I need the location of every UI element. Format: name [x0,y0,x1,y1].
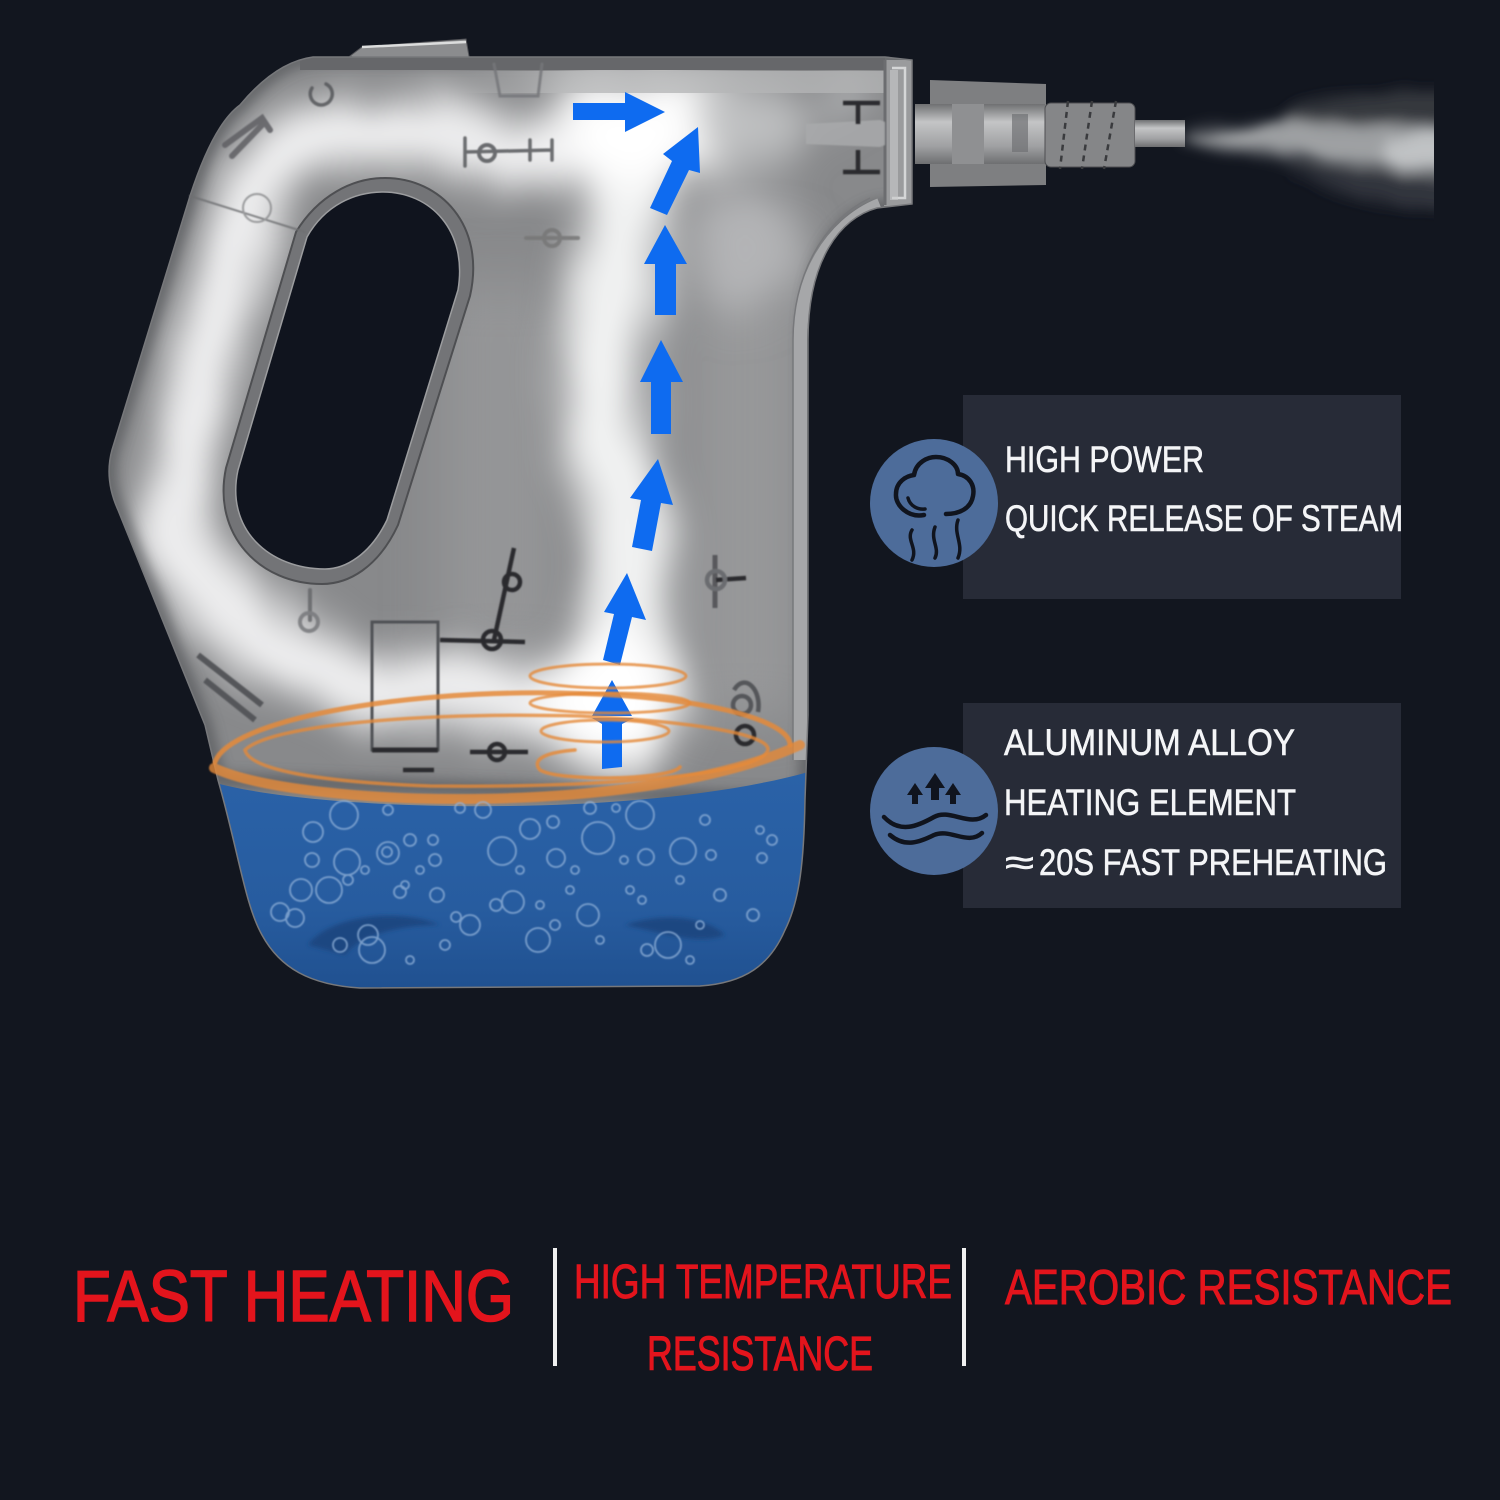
arrow 2 diagonal [650,127,700,215]
text: quick release: QUICK RELEASE OF STEAM [1005,498,1403,539]
right body lighter area [694,296,794,715]
shell outline [109,57,912,988]
heading: high temperature resistance: RESISTANCE [647,1328,873,1381]
text: high power: HIGH POWER [1005,439,1204,480]
panel: high power [870,395,1403,599]
heading: high temperature resistance [574,1256,952,1381]
right wall band [800,205,880,760]
heading: high temperature resistance: HIGH TEMPERATURE [574,1256,952,1309]
arrow 4 [640,340,683,434]
arrow 6 [603,573,646,665]
text: aluminum alloy: ALUMINUM ALLOY [1004,722,1295,763]
handle opening [236,192,460,569]
steam clouds [170,70,875,775]
panel: aluminum heating [870,703,1401,908]
heading: fast heating: FAST HEATING [73,1257,514,1337]
right end cap [884,60,912,206]
faint internal parts [190,64,578,631]
handle rim [224,178,473,584]
barrel [915,104,1045,164]
nozzle tip [1135,120,1185,147]
inner stem [806,120,885,147]
divider right [962,1248,966,1366]
arrow 1 horizontal [573,92,665,132]
top band shading [300,57,885,70]
steam jet from nozzle [1188,90,1470,208]
icon: steam cloud [870,439,998,567]
threaded section [1045,103,1135,167]
dark internal parts [198,103,880,770]
nozzle assembly [915,80,1185,187]
steam flow arrows [573,92,700,769]
arrow 7 [592,680,632,716]
text: preheating: ≈ [1005,842,1034,883]
top lock button [350,39,471,70]
water tank [220,772,806,988]
outer edge darkening [109,57,912,800]
bubbles in water [271,801,777,964]
text: heating element: HEATING ELEMENT [1004,782,1296,823]
heating coils [214,664,800,799]
icon: heat waves [870,747,998,875]
steam cleaner body [109,39,912,1000]
arrow 5 [630,459,673,551]
body shell [109,57,912,988]
tank base shadows [308,916,440,955]
collar [930,80,1046,187]
text: preheating: 20S FAST PREHEATING [1039,842,1387,883]
divider left [553,1248,557,1366]
arrow 3 [644,225,687,315]
